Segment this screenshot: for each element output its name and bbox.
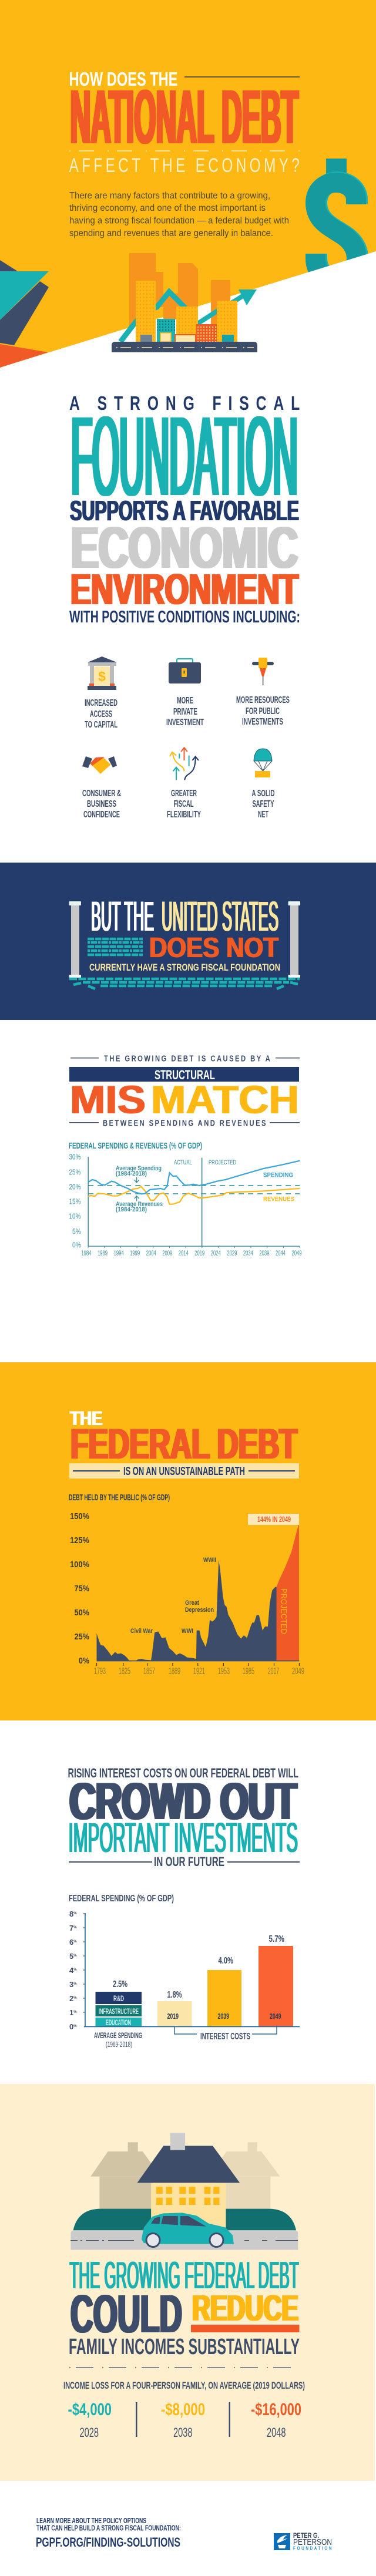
- subheading: in our future: IN OUR FUTURE: [154, 1854, 224, 1869]
- intro text block: having a strong fiscal foundation — a federal budget with: [69, 216, 289, 225]
- bar chart: federal spending: INFRASTRUCTURE: [99, 2006, 139, 2016]
- area chart: debt held by the public: 1857: [143, 1666, 155, 1676]
- illustration: houses and car: [70, 2133, 298, 2250]
- line chart: federal spending and revenues: 0%: [72, 1240, 81, 1250]
- logo: Peter G. Peterson Foundation: PETERSON: [293, 2537, 332, 2547]
- bar chart: federal spending: %: [73, 1982, 77, 1986]
- area chart: debt held by the public: [70, 1512, 304, 1676]
- area chart: debt held by the public: 75%: [74, 1584, 89, 1594]
- labels row one: INCREASED: [85, 698, 118, 708]
- logo: Peter G. Peterson Foundation: [274, 2531, 332, 2551]
- line chart: federal spending and revenues: [69, 1152, 302, 1257]
- area chart: debt held by the public: 1921: [193, 1666, 205, 1676]
- subheading: between spending and revenues: BETWEEN SPENDING AND REVENUES: [103, 1118, 266, 1128]
- line chart: federal spending and revenues: REVENUES: [263, 1196, 294, 1203]
- footer call to action: [36, 2516, 181, 2550]
- chart title: federal spending: FEDERAL SPENDING (% OF GDP): [69, 1894, 174, 1904]
- chart title: debt held by the public: DEBT HELD BY THE PUBLIC (% OF GDP): [69, 1493, 170, 1503]
- bar chart: federal spending: 2039: [217, 2012, 229, 2021]
- labels row two: FISCAL: [174, 799, 194, 809]
- stat: 2048: 2048: [267, 2425, 286, 2440]
- labels row one: INVESTMENTS: [242, 717, 283, 727]
- area chart: debt held by the public: Great: [185, 1600, 199, 1607]
- area chart: debt held by the public: 25%: [74, 1632, 89, 1642]
- chart title: spending and revenues: FEDERAL SPENDING & REVENUES (% OF GDP): [69, 1141, 202, 1151]
- icon: diverging arrows: [170, 747, 199, 780]
- labels row two: CONFIDENCE: [83, 810, 120, 820]
- white diagonal cut: [0, 251, 376, 376]
- heading: the: THE: [70, 1407, 102, 1430]
- stat: 2038: -$8,000: [161, 2400, 205, 2419]
- intro text block: There are many factors that contribute to a growing,: [69, 191, 270, 201]
- bar chart: federal spending: 6: [69, 1938, 73, 1947]
- bar chart: federal spending: %: [73, 2011, 77, 2014]
- area chart: debt held by the public: 1953: [218, 1666, 230, 1676]
- area chart: debt held by the public: 0%: [79, 1656, 89, 1666]
- bar chart: federal spending: %: [73, 1954, 77, 1958]
- bar chart: federal spending: 1: [69, 2008, 73, 2017]
- stat: 2028: 2028: [80, 2425, 99, 2440]
- area chart: debt held by the public: 1825: [119, 1666, 130, 1676]
- area chart: debt held by the public: 125%: [70, 1536, 89, 1545]
- line chart: federal spending and revenues: 1989: [98, 1249, 108, 1257]
- panel: navy banner: [0, 863, 376, 1020]
- bar chart: federal spending: 8: [69, 1910, 73, 1918]
- heading: affect the economy: AFFECT THE ECONOMY?: [69, 154, 300, 177]
- bar chart: federal spending: 1.8%: [167, 1990, 182, 2000]
- area chart: debt held by the public: WWII: [203, 1557, 216, 1564]
- heading: mismatch: [70, 1077, 299, 1122]
- bar chart: federal spending: 0: [69, 2022, 73, 2031]
- bar chart: federal spending: 3: [69, 1980, 73, 1989]
- panel: hero yellow background: [0, 0, 376, 368]
- area chart: debt held by the public: 150%: [70, 1512, 89, 1521]
- line chart: federal spending and revenues: 10%: [69, 1212, 81, 1220]
- line chart: federal spending and revenues: Average Spending: [116, 1165, 162, 1172]
- bar chart: federal spending: %: [73, 1926, 77, 1930]
- line chart: federal spending and revenues: ACTUAL: [174, 1159, 192, 1166]
- bar chart: federal spending: INTEREST COSTS: [200, 2032, 250, 2042]
- line chart: federal spending and revenues: (1984-2018): [116, 1206, 147, 1213]
- line chart: federal spending and revenues: 2014: [179, 1249, 189, 1257]
- line chart: federal spending and revenues: 2009: [162, 1249, 172, 1257]
- bar chart: federal spending: EDUCATION: [106, 2018, 131, 2027]
- bar chart: federal spending: 7: [69, 1924, 73, 1932]
- line chart: federal spending and revenues: 2004: [146, 1249, 156, 1257]
- bar chart: federal spending: 2049: [270, 2012, 281, 2021]
- labels row one: MORE RESOURCES: [236, 695, 290, 705]
- labels row one: TO CAPITAL: [85, 720, 118, 730]
- area chart: debt held by the public: 1889: [169, 1666, 180, 1676]
- area chart: debt held by the public: Depression: [185, 1607, 214, 1614]
- line chart: federal spending and revenues: 2024: [211, 1249, 221, 1257]
- panel: federal debt yellow: [0, 1362, 376, 1720]
- line chart: federal spending and revenues: 1984: [81, 1249, 92, 1257]
- line chart: federal spending and revenues: 2019: [194, 1249, 205, 1257]
- line chart: federal spending and revenues: SPENDING: [263, 1172, 293, 1179]
- line chart: federal spending and revenues: 1994: [114, 1249, 124, 1257]
- line chart: federal spending and revenues: 15%: [69, 1197, 81, 1206]
- heading: but the united states: BUT THE: [91, 894, 154, 940]
- subheading: strong fiscal foundation: CURRENTLY HAVE A STRONG FISCAL FOUNDATION: [89, 962, 280, 973]
- heading: does not: DOES NOT: [149, 932, 278, 964]
- stat: 2048: -$16,000: [251, 2400, 301, 2419]
- structural banner: STRUCTURAL: [155, 1068, 215, 1082]
- bar chart: federal spending: (1969-2018): [106, 2040, 132, 2049]
- line chart: federal spending and revenues: 2029: [227, 1249, 237, 1257]
- icon: bank: $: [98, 669, 106, 684]
- line chart: federal spending and revenues: 2044: [276, 1249, 286, 1257]
- stat: 2028: -$4,000: [68, 2400, 112, 2419]
- heading: reduce: REDUCE: [192, 2288, 298, 2329]
- bar chart: federal spending: R&D: [113, 1994, 124, 2003]
- heading: reduce: [191, 2288, 300, 2332]
- dashed divider: [69, 150, 300, 151]
- icon: bank: [88, 656, 117, 690]
- heading: mismatch: MIS: [70, 1077, 146, 1122]
- line chart: federal spending and revenues: 20%: [69, 1183, 81, 1191]
- labels row one: PRIVATE: [173, 707, 197, 717]
- labels row one: MORE: [177, 696, 193, 706]
- labels row one: ACCESS: [90, 709, 112, 719]
- intro text block: [69, 191, 289, 238]
- labels row two: FLEXIBILITY: [167, 810, 201, 820]
- line chart: federal spending and revenues: 25%: [69, 1167, 81, 1177]
- icon: handshake: [82, 756, 117, 774]
- bar chart: federal spending: %: [73, 2025, 77, 2028]
- line chart: federal spending and revenues: Average Revenues: [116, 1201, 163, 1208]
- dashed divider dark: [69, 2367, 300, 2368]
- stat: 2048: [251, 2400, 301, 2440]
- labels row two: GREATER: [171, 789, 197, 799]
- footer call to action: LEARN MORE ABOUT THE POLICY OPTIONS: [36, 2516, 146, 2525]
- bar chart: federal spending: 4: [69, 1966, 73, 1975]
- intro text block: spending and revenues that are generally in balance.: [69, 228, 273, 238]
- area chart: debt held by the public: PROJECTED: [280, 1588, 289, 1634]
- bar chart: federal spending: %: [73, 1940, 77, 1944]
- line chart: federal spending and revenues: 5%: [72, 1227, 81, 1235]
- bar chart: federal spending: 5.7%: [269, 1934, 284, 1944]
- bar chart: federal spending: 4.0%: [219, 1956, 233, 1966]
- banner: unsustainable path: [69, 1463, 299, 1479]
- illustration: city skyline with rising arrow: [112, 253, 257, 352]
- labels row two: NET: [258, 810, 268, 820]
- brick wall block: [88, 939, 143, 955]
- crumbling brick foundation: [69, 979, 300, 989]
- line chart: federal spending and revenues: 2034: [243, 1249, 253, 1257]
- labels row two: CONSUMER &: [82, 789, 121, 799]
- bar chart: federal spending: AVERAGE SPENDING: [94, 2031, 142, 2040]
- structural banner: [69, 1067, 299, 1082]
- heading: mismatch: MATCH: [151, 1077, 299, 1122]
- labels row two: [82, 789, 275, 820]
- banner: unsustainable path: IS ON AN UNSUSTAINABLE PATH: [123, 1465, 245, 1478]
- labels row one: [85, 695, 290, 730]
- icon: parachute: [254, 749, 272, 777]
- stat dividers: [136, 2402, 230, 2437]
- bar chart: federal spending: 2.5%: [113, 1979, 127, 1989]
- labels row one: INVESTMENT: [166, 718, 204, 728]
- decorative shapes left: [0, 260, 49, 368]
- bar chart: federal spending: 2019: [167, 2012, 179, 2021]
- labels row two: BUSINESS: [87, 799, 116, 809]
- line chart: federal spending and revenues: 30%: [69, 1152, 81, 1161]
- heading: a strong fiscal: A STRONG FISCAL: [69, 393, 300, 415]
- footer call to action: THAT CAN HELP BUILD A STRONG FISCAL FOUNDATION:: [36, 2524, 181, 2532]
- left pillar: [69, 901, 81, 978]
- heading: could: COULD: [70, 2284, 182, 2344]
- line chart: federal spending and revenues: 2039: [259, 1249, 270, 1257]
- bar chart: federal spending: 2: [69, 1994, 73, 2003]
- bar chart: federal spending: [69, 1910, 300, 2049]
- stat: 2028: [68, 2400, 112, 2440]
- stat: 2038: 2038: [173, 2425, 193, 2440]
- labels row two: A SOLID: [251, 789, 275, 799]
- icon: jackhammer: [252, 658, 274, 685]
- area chart: debt held by the public: Civil War: [130, 1628, 153, 1635]
- bar chart: federal spending: %: [73, 1912, 77, 1915]
- icon: teal dollar sign: [315, 159, 358, 279]
- logo: Peter G. Peterson Foundation: FOUNDATION: [293, 2545, 332, 2551]
- right pillar: [288, 901, 300, 978]
- area chart: debt held by the public: 1793: [94, 1666, 106, 1676]
- area chart: debt held by the public: 2017: [268, 1666, 279, 1676]
- stat: 2038: [161, 2400, 205, 2440]
- bar chart: federal spending: %: [73, 1996, 77, 2000]
- footer call to action: PGPF.ORG/FINDING-SOLUTIONS: [36, 2535, 180, 2550]
- heading: How does the: HOW DOES THE: [69, 68, 177, 90]
- line chart: federal spending and revenues: (1984-2018): [116, 1170, 147, 1177]
- line chart: federal spending and revenues: 2049: [291, 1249, 302, 1257]
- line chart: federal spending and revenues: 1999: [130, 1249, 140, 1257]
- icon: briefcase: [169, 659, 201, 683]
- logo: Peter G. Peterson Foundation: PETER G.: [293, 2531, 319, 2540]
- panel: cream family incomes: [0, 2084, 375, 2481]
- labels row two: SAFETY: [253, 799, 274, 809]
- area chart: debt held by the public: 144% IN 2049: [257, 1514, 291, 1524]
- area chart: debt held by the public: 2049: [292, 1666, 304, 1676]
- bar chart: federal spending: %: [73, 1968, 77, 1972]
- intro text block: thriving economy, and one of the most important is: [69, 203, 266, 213]
- area chart: debt held by the public: 1985: [243, 1666, 254, 1676]
- line chart: federal spending and revenues: PROJECTED: [209, 1159, 236, 1166]
- labels row one: FOR PUBLIC: [246, 706, 280, 716]
- area chart: debt held by the public: 50%: [74, 1608, 89, 1618]
- bar chart: federal spending: 5: [69, 1952, 73, 1961]
- area chart: debt held by the public: WWI: [182, 1628, 193, 1635]
- heading: growing debt is caused by: THE GROWING DEBT IS CAUSED BY A: [104, 1053, 270, 1063]
- area chart: debt held by the public: 100%: [70, 1560, 89, 1570]
